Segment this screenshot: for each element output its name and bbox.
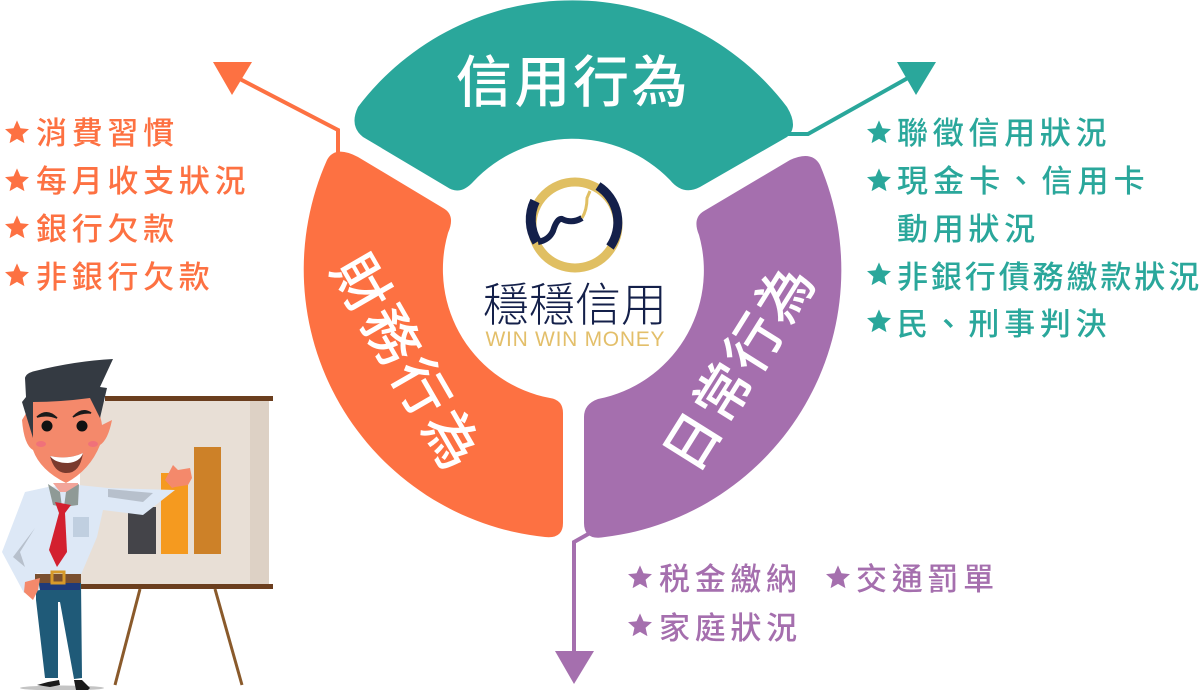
- list: daily items: 家庭狀況: [659, 611, 802, 646]
- arrow: purple: [555, 533, 594, 684]
- list: credit items: 民、刑事判決: [897, 307, 1111, 342]
- logo emblem: [531, 182, 618, 268]
- list: financial items: 消費習慣: [36, 116, 179, 151]
- list: financial items: 每月收支狀況: [36, 164, 250, 199]
- list: financial items: 非銀行欠款: [36, 260, 214, 295]
- list: credit items: 聯徵信用狀況: [897, 116, 1111, 151]
- list: financial items: [5, 116, 250, 295]
- logo: win win money: [483, 182, 667, 351]
- logo tagline: WIN WIN MONEY: [486, 328, 664, 351]
- segment: credit behaviour: [354, 0, 793, 191]
- list: financial items: 銀行欠款: [36, 212, 179, 247]
- list: credit items: 非銀行債務繳款狀況: [897, 260, 1200, 295]
- segment: financial behaviour: [304, 152, 563, 537]
- list: daily items: 税金繳納: [659, 562, 802, 597]
- bar chart: [128, 447, 221, 554]
- heading: financial behaviour: 財務行為: [319, 244, 494, 483]
- arrow: teal: [788, 62, 936, 134]
- segment: daily behaviour: [584, 156, 841, 538]
- list: credit items: [867, 116, 1200, 342]
- illustration: presenter with chart board: [2, 359, 273, 690]
- list: credit items: 動用狀況: [897, 212, 1040, 247]
- list: daily items: [628, 562, 999, 646]
- arrow: orange: [213, 62, 338, 156]
- list: credit items: 現金卡、信用卡: [897, 164, 1150, 199]
- heading: credit behaviour: 信用行為: [456, 51, 690, 114]
- presentation board: [78, 396, 273, 685]
- heading: daily behaviour: 日常行為: [651, 252, 828, 482]
- presenter figure: [2, 359, 192, 690]
- logo name: 穩穩信用: [483, 279, 667, 331]
- list: daily items: 交通罰單: [856, 562, 999, 597]
